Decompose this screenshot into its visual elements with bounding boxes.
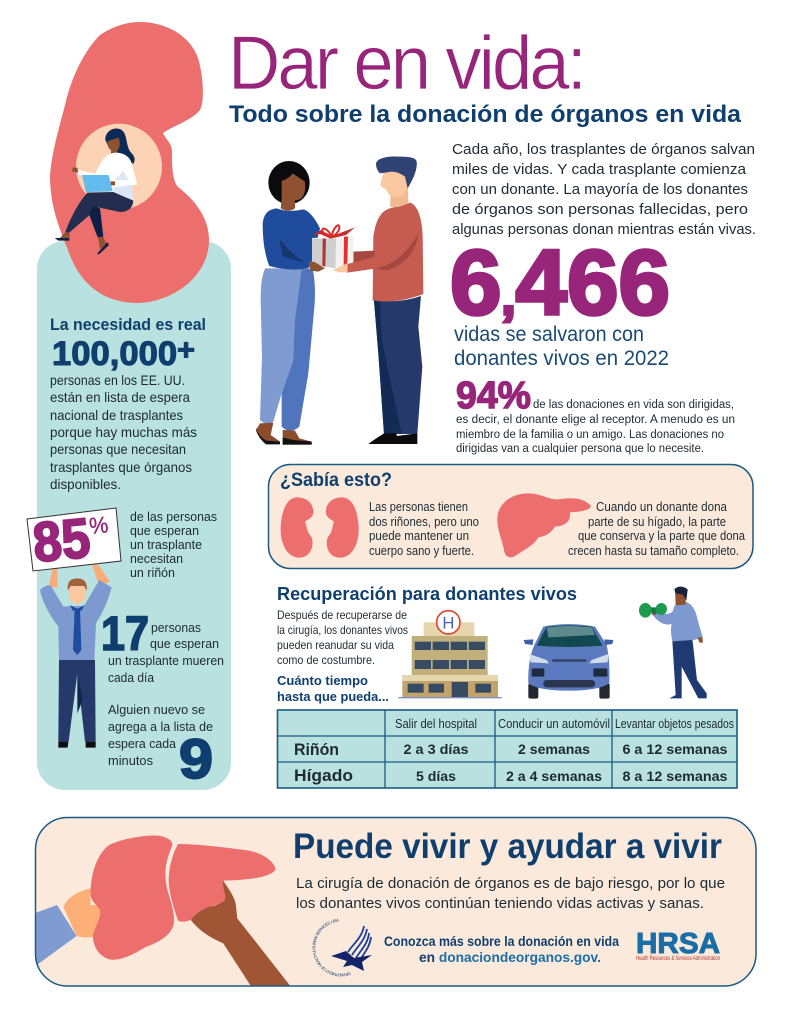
row: kidney: 6 a 12 semanas <box>622 742 728 757</box>
table header row <box>395 717 734 731</box>
subtitle: Todo sobre la donación de órganos en vida <box>229 101 742 128</box>
icon: woman with laptop in circle <box>55 124 162 255</box>
text: recovery description: como de costumbre. <box>277 653 375 667</box>
number: 100,000+: 100,000 <box>52 335 175 373</box>
table header row: Salir del hospital <box>395 717 477 731</box>
text: 17 people die each day: un trasplante mueren <box>108 653 224 668</box>
text: recovery description <box>277 608 408 667</box>
text: liver regrows: crecen hasta su tamaño completo. <box>568 544 739 558</box>
number: 6,466: 6,466 <box>450 232 670 334</box>
text: low risk surgery: los donantes vivos continúan teniendo vidas activas y sanas. <box>296 895 704 912</box>
sign: 85%: 85 <box>30 506 93 574</box>
row: liver: 8 a 12 semanas <box>622 769 728 784</box>
sign: 85%: % <box>88 511 109 539</box>
row: kidney: 2 a 3 días <box>404 742 468 757</box>
text: two kidneys: Las personas tienen <box>369 500 468 514</box>
text: 85% need a kidney: un riñón <box>130 566 175 580</box>
text: low risk surgery <box>296 875 725 912</box>
row: kidney: Riñón <box>294 740 339 759</box>
logo: HHS <box>312 918 372 976</box>
row: kidney <box>294 740 728 759</box>
text: directed donations: dirigidas van a cualquier persona que lo necesite. <box>456 443 704 455</box>
text: added every 9 minutes: agrega a la lista de <box>108 719 213 734</box>
text: lives saved: donantes vivos en 2022 <box>454 347 669 370</box>
text: introduction: de órganos son personas fallecidas, pero <box>452 202 748 218</box>
panel: you can live and help live <box>34 816 757 987</box>
icon: hospital <box>398 611 502 698</box>
row: liver: 5 días <box>416 769 456 784</box>
hand on gift <box>308 262 325 272</box>
text: waiting list explanation: están en lista de espera <box>50 389 190 405</box>
text: how long until: hasta que pueda... <box>277 689 389 704</box>
heading: did you know: ¿Sabía esto? <box>280 470 392 491</box>
icon: liver <box>497 493 591 557</box>
text: introduction: miles de vidas. Y cada trasplante comienza <box>452 162 747 178</box>
number: 9: 9 <box>179 727 213 790</box>
text: 85% need a kidney: que esperan <box>130 524 199 538</box>
text: recovery description: la cirugía, los donantes vivos <box>277 623 408 637</box>
text: directed donations: de las donaciones en vida son dirigidas, <box>533 399 734 411</box>
text: 85% need a kidney: necesitan <box>130 552 183 566</box>
text: waiting list explanation: trasplantes que órganos <box>50 459 192 475</box>
text: added every 9 minutes: Alguien nuevo se <box>108 702 205 717</box>
text: directed donations <box>456 399 735 455</box>
text: waiting list explanation <box>50 372 197 492</box>
text: introduction: algunas personas donan mientras están vivas. <box>452 222 756 238</box>
panel: did you know <box>268 464 753 568</box>
text: learn more <box>384 934 619 965</box>
icon: man lifting dumbbell <box>639 587 707 698</box>
text: 17 people die each day: personas <box>151 620 201 635</box>
text: 17 people die each day <box>108 620 224 685</box>
text: how long until <box>277 673 389 704</box>
logo: HHS: DEPARTMENT OF HEALTH & HUMAN SERVICES, USA <box>312 918 351 976</box>
table header row: Levantar objetos pesados <box>615 717 734 731</box>
panel border <box>36 818 756 986</box>
text: waiting list explanation: porque hay muchas más <box>50 424 197 440</box>
text: low risk surgery: La cirugía de donación de órganos es de bajo riesgo, por lo que <box>296 875 725 892</box>
icon: car <box>524 624 613 699</box>
row: liver: 2 a 4 semanas <box>506 769 602 784</box>
text: recovery description: Después de recuperarse de <box>277 608 407 622</box>
heading: you can live: Puede vivir y ayudar a vivir <box>293 827 722 866</box>
text: added every 9 minutes: minutos <box>108 753 153 768</box>
text: waiting list explanation: nacional de trasplantes <box>50 407 183 423</box>
text: two kidneys <box>369 500 479 558</box>
text: 17 people die each day: que esperan <box>150 636 219 651</box>
text: learn more: en donaciondeorganos.gov. <box>419 949 601 965</box>
text: two kidneys: cuerpo sano y fuerte. <box>369 544 474 558</box>
title: Dar en vida: <box>228 21 584 106</box>
illustration: woman and man sharing a gift <box>256 157 423 445</box>
illustration: two hands holding liver <box>30 836 291 987</box>
text: liver regrows: Cuando un donante dona <box>596 500 727 514</box>
row: kidney: 2 semanas <box>518 742 590 757</box>
text: liver regrows: parte de su hígado, la parte <box>588 515 726 529</box>
table header row: Conducir un automóvil <box>498 717 610 731</box>
text: 85% need a kidney: de las personas <box>130 510 217 524</box>
number: 17: 17 <box>101 608 149 661</box>
text: 85% need a kidney: un trasplante <box>130 538 202 552</box>
text: added every 9 minutes <box>108 702 213 768</box>
text: directed donations: es decir, el donante elige al receptor. A menudo es un <box>456 414 735 426</box>
icon: two kidneys <box>281 497 359 558</box>
logo: HRSA: Health Resources & Services Administration <box>636 955 720 962</box>
icon: large kidney <box>50 22 209 303</box>
heading: need is real: La necesidad es real <box>50 316 206 334</box>
text: waiting list explanation: personas en los EE. UU. <box>50 372 185 388</box>
text: two kidneys: dos riñones, pero uno <box>369 515 479 529</box>
illustration: man holding 85% sign <box>27 506 121 748</box>
text: added every 9 minutes: espera cada <box>108 736 177 751</box>
text: waiting list explanation: disponibles. <box>50 476 121 492</box>
text: two kidneys: puede mantener un <box>369 529 469 543</box>
text: lives saved <box>454 323 669 370</box>
number: 94%: 94% <box>456 375 531 417</box>
text: 85% need a kidney <box>130 510 217 580</box>
text: directed donations: miembro de la familia o un amigo. Las donaciones no <box>456 429 724 441</box>
text: liver regrows <box>568 500 745 558</box>
text: recovery description: pueden reanudar su vida <box>277 638 394 652</box>
text: waiting list explanation: personas que necesitan <box>50 441 186 457</box>
row: liver: Hígado <box>294 766 353 785</box>
heading: recovery: Recuperación para donantes vivos <box>277 584 577 604</box>
text: liver regrows: que conserva y la parte que dona <box>578 529 745 543</box>
row: liver <box>294 766 728 785</box>
panel: the need is real <box>27 22 231 790</box>
text: 17 people die each day: cada día <box>108 670 155 685</box>
number: 100,000+: + <box>177 334 195 367</box>
text: learn more: Conozca más sobre la donación en vida <box>384 934 619 949</box>
table: recovery times <box>277 710 737 788</box>
text: lives saved: vidas se salvaron con <box>454 323 644 346</box>
text: introduction: con un donante. La mayoría de los donantes <box>452 182 748 198</box>
text: how long until: Cuánto tiempo <box>277 673 368 688</box>
text: introduction <box>452 142 756 238</box>
logo: HRSA: HRSA <box>636 928 720 960</box>
icon: hospital: H <box>442 613 454 632</box>
text: introduction: Cada año, los trasplantes de órganos salvan <box>452 142 755 158</box>
